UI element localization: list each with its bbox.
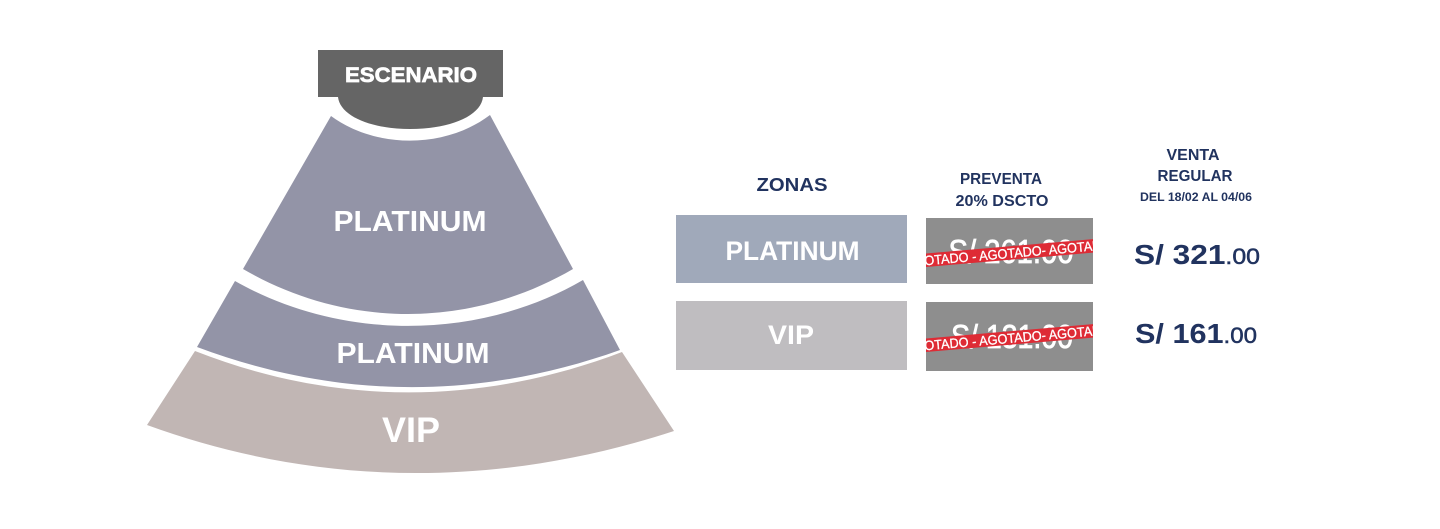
row: platinum presale price, sold out: S/ 261.00	[948, 233, 1074, 270]
row: VIP presale price, sold out: S/ 131.00	[951, 318, 1073, 355]
stage: ESCENARIO	[345, 64, 477, 87]
heading: venta regular	[1140, 147, 1252, 204]
row: VIP presale price, sold out	[926, 302, 1093, 371]
heading: venta regular: DEL 18/02 AL 04/06	[1140, 192, 1252, 204]
heading: zonas: ZONAS	[756, 175, 828, 195]
heading: venta regular: REGULAR	[1158, 168, 1233, 185]
zone: upper platinum: PLATINUM	[334, 206, 486, 238]
row: platinum presale price, sold out	[926, 218, 1093, 284]
zone: VIP	[147, 351, 674, 473]
heading: preventa: 20% DSCTO	[956, 193, 1048, 210]
zone: lower platinum: PLATINUM	[336, 338, 490, 370]
heading: preventa: PREVENTA	[960, 171, 1042, 188]
zone: lower platinum	[197, 280, 620, 387]
row: platinum zone label	[676, 215, 907, 283]
row: platinum presale price, sold out: AGOTADO - AGOTADO- AGOTADO	[905, 237, 1112, 270]
row: VIP zone label	[676, 301, 907, 370]
heading: venta regular: VENTA	[1166, 147, 1220, 164]
heading: preventa	[956, 171, 1048, 210]
zone: VIP: VIP	[382, 411, 440, 450]
row: platinum regular price: S/ 321 .00	[1134, 239, 1260, 270]
row: platinum zone label: PLATINUM	[726, 236, 860, 266]
zone: upper platinum	[243, 115, 573, 314]
row: VIP regular price: S/ 161 .00	[1135, 318, 1257, 349]
row: VIP zone label: VIP	[768, 320, 814, 350]
seating map	[147, 50, 674, 473]
row: VIP presale price, sold out: AGOTADO - AGOTADO- AGOTADO	[905, 322, 1112, 355]
stage	[318, 50, 503, 129]
price table	[676, 147, 1260, 371]
